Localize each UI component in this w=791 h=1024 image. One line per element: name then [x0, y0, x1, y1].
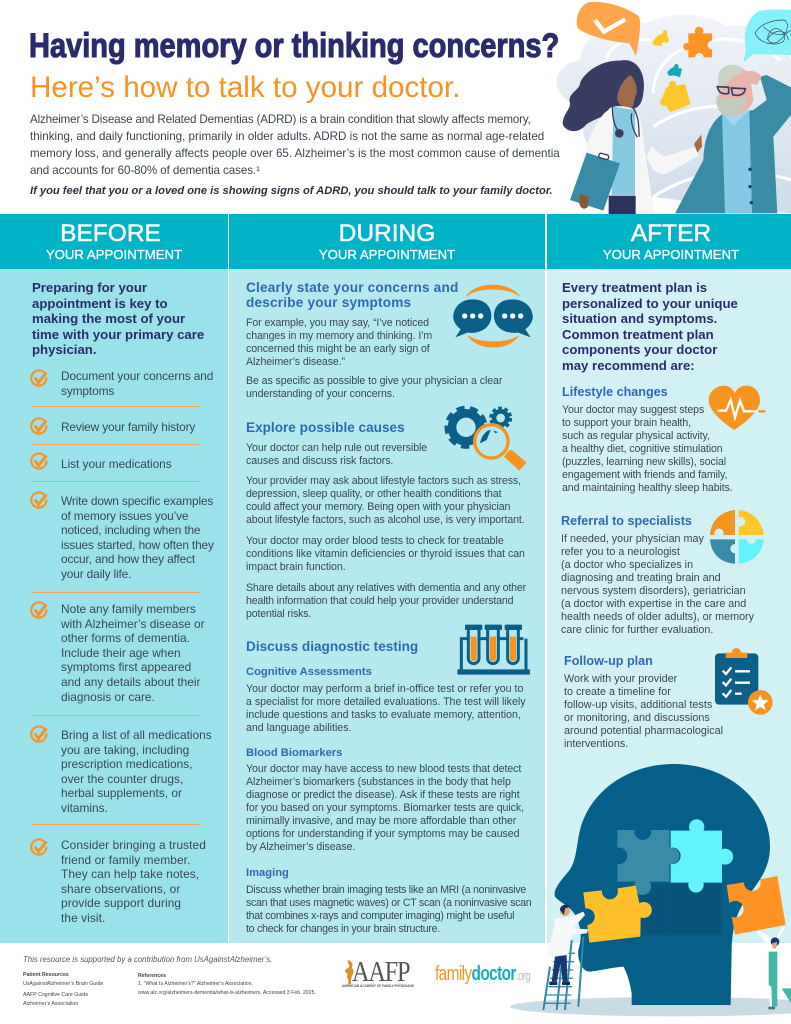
before intro: physician. [32, 342, 96, 357]
aafp tagline: AMERICAN ACADEMY OF FAMILY PHYSICIANS [342, 984, 414, 988]
references: 1. “What Is Alzheimer’s?” Alzheimer’s Association, [138, 981, 253, 987]
intro text: and accounts for 60-80% of dementia cases.¹ [30, 164, 260, 177]
after: lifestyle text [562, 404, 733, 494]
puzzle: teal piece [617, 830, 679, 895]
checklist item: friend: Consider bringing a trusted [61, 838, 206, 852]
during: biomarkers text [246, 763, 524, 853]
after: referral text: (a doctor with expertise in the care and [561, 598, 746, 610]
checklist item: family: and any details about their [61, 675, 200, 689]
during: concerns heading: Clearly state your concerns and [246, 280, 458, 295]
during: diagnostic heading: Discuss diagnostic testing [246, 639, 418, 654]
during: cognitive text: Your doctor may perform a brief in-office test or refer you to [246, 683, 523, 695]
after intro: personalized to your unique [562, 296, 738, 311]
during: causes text: causes and discuss risk factors. [246, 455, 393, 467]
after: referral text: (a doctor who specializes in [561, 559, 693, 571]
during: concerns text: For example, you may say, “I’ve noticed [246, 317, 429, 329]
checklist item: family: diagnosis or care. [61, 690, 155, 704]
patient resources: Alzheimer’s Association [23, 1001, 78, 1007]
after: follow-up text: or monitoring, and discussions [564, 712, 710, 724]
panel: after [547, 214, 791, 943]
after: referral text: care clinic for further evaluation. [561, 624, 713, 636]
during: cognitive text [246, 683, 526, 734]
checklist item: examples: Write down specific examples [61, 494, 213, 508]
illustration: doctor and patient [556, 2, 791, 214]
during: relatives text: health information that could help your provider understand [246, 595, 513, 607]
during: lifestyle factors text: about lifestyle factors, such as alcohol use, is very important. [246, 514, 525, 526]
during: imaging text: Discuss whether brain imaging tests like an MRI (a noninvasive [246, 884, 526, 896]
during: biomarkers text: options for understanding if your symptoms may be caused [246, 828, 519, 840]
during: causes text [246, 442, 427, 467]
icons layer [444, 284, 773, 715]
during: blood tests text [246, 535, 525, 573]
checklist item: medications: List your medications [61, 457, 172, 471]
after: lifestyle text: a healthy diet, cognitive stimulation [562, 443, 723, 455]
checklist item: friend: the visit. [61, 911, 105, 925]
references: References [138, 973, 166, 979]
puzzle pieces [652, 27, 712, 112]
checklist item: list: vitamins. [61, 801, 108, 815]
doctor [563, 60, 702, 220]
checklist item: examples: noticed, including when the [61, 523, 200, 537]
after: follow-up text: around potential pharmacological [564, 725, 723, 737]
after intro [562, 280, 738, 373]
after: lifestyle text: (puzzles, learning new skills), social [562, 456, 726, 468]
during: imaging subheading: Imaging [246, 867, 289, 879]
checklist item: family: with Alzheimer’s disease or [61, 617, 205, 631]
during: concerns heading: describe your symptoms [246, 295, 411, 310]
title: Having memory or thinking concerns? [29, 27, 559, 65]
during: lifestyle factors text: Your provider may ask about lifestyle factors such as stress, [246, 475, 521, 487]
checklist item: friend: friend or family member. [61, 853, 190, 867]
patient resources: AAFP Cognitive Care Guide [23, 992, 88, 998]
during: relatives text [246, 582, 526, 620]
during: lifestyle factors text: depression, sleep quality, or other health conditions that [246, 488, 501, 500]
during: concerns heading [246, 280, 458, 310]
checklist item: friend: share observations, or [61, 882, 180, 896]
checklist item: list: Bring a list of all medications [61, 728, 212, 742]
heading: during: DURING [339, 220, 435, 247]
during: imaging text: scan that uses magnetic waves) or CT scan (a noninvasive scan [246, 897, 531, 909]
during: relatives text: Share details about any relatives with dementia and any other [246, 582, 526, 594]
during: imaging text: that combines x-rays and computer imaging) might be useful [246, 910, 514, 922]
checklist item: document: Document your concerns and [61, 369, 213, 383]
logo: AAFP [342, 956, 414, 988]
aafp mark [345, 960, 354, 984]
after intro: components your doctor [562, 342, 717, 357]
during: specific text: Be as specific as possible to give your physician a clear [246, 375, 502, 387]
during: biomarkers text: for you based on your symptoms. Biomarker tests are quick, [246, 802, 524, 814]
after: follow-up text: follow-up visits, additional tests [564, 699, 712, 711]
checklist item: list: herbal supplements, or [61, 786, 182, 800]
during: imaging text [246, 884, 531, 935]
after: referral heading: Referral to specialists [561, 514, 692, 528]
during: concerns text: Alzheimer’s disease.” [246, 356, 345, 368]
heading: before: BEFORE [60, 220, 161, 247]
aafp letters: AAFP [352, 956, 409, 988]
before header band [0, 214, 228, 269]
puzzle: orange piece [727, 876, 786, 935]
check icons [30, 369, 48, 856]
after intro: situation and symptoms. [562, 311, 717, 326]
after: referral text [561, 533, 754, 636]
after intro: Common treatment plan [562, 327, 714, 342]
patient resources: UsAgainstAlzheimer’s Brain Guide [23, 981, 103, 987]
checklist item: examples: occur, and how they affect [61, 552, 195, 566]
during: biomarkers text: Alzheimer’s biomarkers (substances in the body that help [246, 776, 511, 788]
after: follow-up text: interventions. [564, 738, 628, 750]
before intro: appointment is key to [32, 296, 168, 311]
support note: This resource is supported by a contribution from UsAgainstAlzheimer’s. [23, 955, 272, 964]
during: causes text: Your doctor can help rule out reversible [246, 442, 427, 454]
checklist item: list [61, 728, 212, 815]
after: lifestyle text: engagement with friends and family, [562, 469, 727, 481]
before intro: Preparing for your [32, 280, 147, 295]
after: follow-up heading: Follow-up plan [564, 654, 653, 668]
during: biomarkers text: minimally invasive, and may be more affordable than other [246, 815, 516, 827]
panel: during [229, 214, 545, 943]
after: referral text: If needed, your physician may [561, 533, 704, 545]
during: biomarkers subheading: Blood Biomarkers [246, 747, 342, 759]
checklist item: examples: of memory issues you’ve [61, 509, 188, 523]
during: blood tests text: impact brain function. [246, 561, 346, 573]
heading: after: AFTER [631, 220, 711, 247]
during: specific text: understanding of your concerns. [246, 388, 395, 400]
during header band [229, 214, 545, 269]
before intro [32, 280, 204, 357]
after: follow-up text [564, 673, 723, 750]
brain background [557, 15, 791, 213]
logo: familydoctor: familydoctor.org [435, 962, 530, 985]
during: imaging text: to check for changes in your brain structure. [246, 923, 440, 935]
during: concerns text: concerned this might be an early sign of [246, 343, 430, 355]
after: follow-up text: Work with your provider [564, 673, 677, 685]
icon: test tubes [457, 625, 530, 675]
checklist item: friend: They can help take notes, [61, 867, 199, 881]
after: lifestyle heading: Lifestyle changes [562, 385, 668, 399]
during: causes heading: Explore possible causes [246, 420, 405, 435]
during: lifestyle factors text: could affect your memory. Being open with your physician [246, 501, 510, 513]
after intro: Every treatment plan is [562, 280, 707, 295]
after: referral text: refer you to a neurologist [561, 546, 680, 558]
after header band [547, 214, 791, 269]
checklist item: family: other forms of dementia. [61, 631, 190, 645]
checklist item: list: you are taking, including [61, 743, 189, 757]
heading: before [46, 220, 182, 262]
during: cognitive subheading: Cognitive Assessments [246, 666, 372, 678]
checklist item: list: prescription medications, [61, 757, 193, 771]
during: biomarkers text: diagnose or predict the disease). Ask if these tests are right [246, 789, 520, 801]
during: biomarkers text: Your doctor may have access to new blood tests that detect [246, 763, 521, 775]
heading: before: YOUR APPOINTMENT [46, 247, 182, 262]
during: blood tests text: conditions like vitamin deficiencies or thyroid issues that can [246, 548, 525, 560]
head silhouette [555, 764, 770, 1005]
during: cognitive text: and language abilities. [246, 722, 351, 734]
after intro: may recommend are: [562, 358, 695, 373]
intro text [30, 113, 560, 177]
checklist [30, 369, 48, 856]
intro text: thinking, and daily functioning, primarily in older adults. ADRD is not the same as normal age-related [30, 130, 544, 143]
during: cognitive text: a specialist for more detailed evaluations. The test will likely [246, 696, 526, 708]
patient resources [23, 972, 104, 1007]
checklist item: examples: issues started, how often they [61, 538, 214, 552]
during: biomarkers text: by Alzheimer’s disease. [246, 841, 355, 853]
checklist item: list: over the counter drugs, [61, 772, 183, 786]
puzzle: cyan piece [671, 819, 733, 893]
doctor on ladder [543, 905, 588, 1010]
references [138, 973, 316, 996]
icon: puzzle circle [710, 510, 764, 564]
checklist item: examples [61, 494, 214, 581]
during: concerns text [246, 317, 432, 368]
before intro: time with your primary care [32, 327, 204, 342]
call to action: If you feel that you or a loved one is showing signs of ADRD, you should talk to your family doctor. [30, 185, 553, 197]
orange speech bubble [577, 2, 640, 56]
before intro: making the most of your [32, 311, 185, 326]
heading: during [318, 220, 456, 262]
checklist item: family: symptoms first appeared [61, 660, 191, 674]
during: relatives text: potential risks. [246, 608, 311, 620]
icon: speech bubbles [453, 285, 533, 347]
icon: clipboard [715, 648, 773, 715]
after: lifestyle text: and maintaining healthy sleep habits. [562, 482, 733, 494]
patient [675, 65, 791, 213]
after: lifestyle text: such as regular physical activity, [562, 430, 710, 442]
during: concerns text: changes in my memory and thinking. I’m [246, 330, 432, 342]
panel: before [0, 214, 228, 943]
after: referral text: health needs of older adults), or memory [561, 611, 754, 623]
heading: during: YOUR APPOINTMENT [319, 247, 455, 262]
checklist item: review: Review your family history [61, 420, 195, 434]
during: blood tests text: Your doctor may order blood tests to check for treatable [246, 535, 504, 547]
icon: heart [709, 386, 765, 430]
intro text: Alzheimer’s Disease and Related Dementias (ADRD) is a brain condition that slowly affects memory, [30, 113, 531, 126]
during: lifestyle factors text [246, 475, 525, 526]
puzzle: yellow piece [583, 886, 652, 943]
cyan speech bubble [743, 10, 791, 63]
during: specific text [246, 375, 502, 400]
icon: gears and magnifier [447, 408, 527, 471]
checklist item: document: symptoms [61, 384, 114, 398]
checklist item: examples: your daily life. [61, 567, 131, 581]
checklist item: family [61, 602, 205, 704]
patient resources: Patient Resources [23, 972, 69, 978]
references: www.alz.org/alzheimers-dementia/what-is-alzheimers. Accessed 3 Feb. 2025. [138, 990, 316, 996]
subtitle: Here’s how to talk to your doctor. [30, 71, 460, 104]
nurse [757, 927, 791, 1009]
floor shadow [510, 997, 791, 1016]
after: follow-up text: to create a timeline for [564, 686, 671, 698]
intro text: memory loss, and generally affects people over 65. Alzheimer’s is the most common cause of dementia [30, 147, 560, 160]
illustration: head with puzzle pieces [510, 764, 791, 1016]
checklist item: family: Note any family members [61, 602, 196, 616]
checklist item: document [61, 369, 213, 398]
heading: after: YOUR APPOINTMENT [603, 247, 739, 262]
after: referral text: nervous system disorders), geriatrician [561, 585, 746, 597]
checklist item: family: Include their age when [61, 646, 181, 660]
during: cognitive text: include questions and tasks to evaluate memory, attention, [246, 709, 521, 721]
after: referral text: diagnosing and treating brain and [561, 572, 721, 584]
checklist item: friend: provide support during [61, 896, 181, 910]
after: lifestyle text: to support your brain health, [562, 417, 691, 429]
puzzle: dark lower pieces [640, 883, 722, 935]
checklist item: friend [61, 838, 206, 925]
after: lifestyle text: Your doctor may suggest steps [562, 404, 704, 416]
heading: after [602, 220, 740, 262]
